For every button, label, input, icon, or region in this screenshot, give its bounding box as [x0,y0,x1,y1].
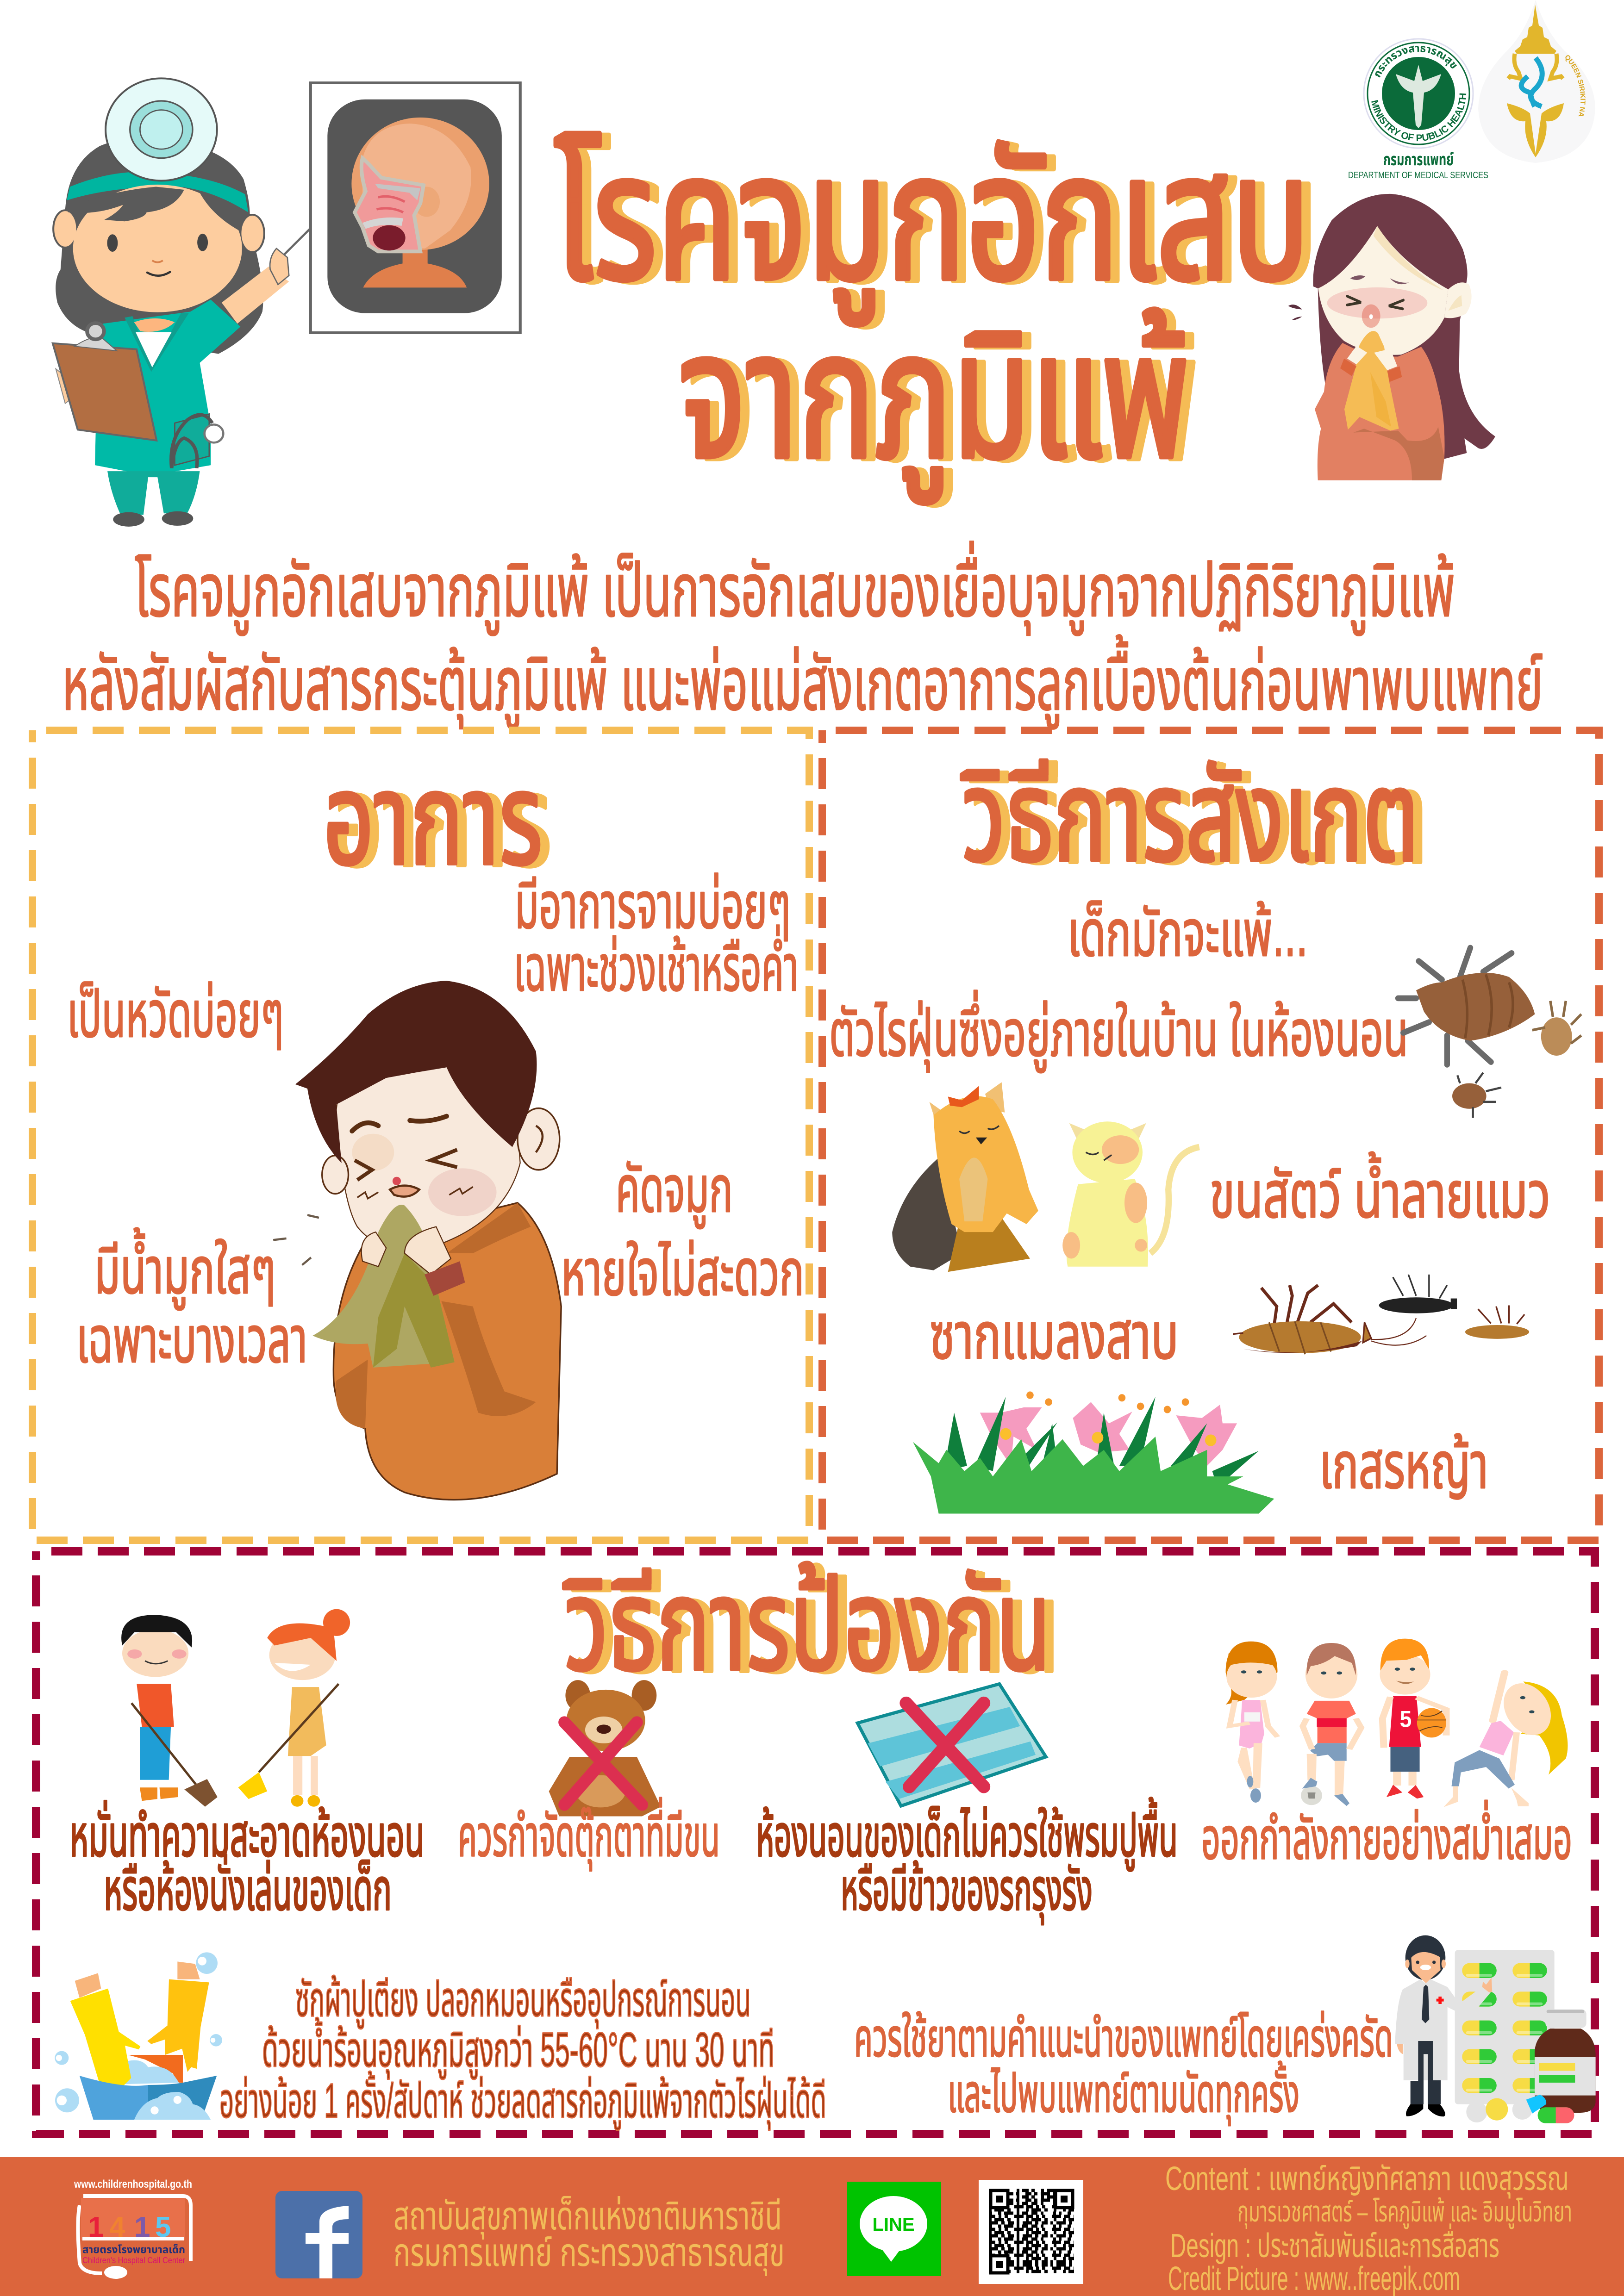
illustration: washing bedding [55,1952,222,2120]
text: wash bedding [219,1972,826,2130]
title [554,119,1319,505]
text: grass pollen: เกสรหญ้า [1319,1429,1488,1502]
logo: ministry of public health [1348,39,1488,180]
heading: how to observe: วิธีการสังเกต [970,747,1428,890]
illustration: carpet crossed out [857,1684,1046,1806]
credits [1165,2160,1572,2296]
text: remove furry toys: ควรกำจัดตุ๊กตาที่มีขน [458,1797,720,1871]
diagram: nasal cross-section [311,83,520,333]
text: wash bedding: ซักผ้าปูเตียง ปลอกหมอนหรืออุปกรณ์การนอน [295,1972,751,2029]
text: wash bedding: อย่างน้อย 1 ครั้ง/สัปดาห์ ช่วยลดสารก่อภูมิแพ้จากตัวไรฝุ่นได้ดี [219,2071,826,2130]
text: frequent colds: เป็นหวัดบ่อยๆ [67,978,284,1051]
text: no carpets: หรือมีข้าวของรกรุงรัง [841,1858,1093,1925]
text: stuffy nose: คัดจมูก [616,1153,733,1229]
text: stuffy nose: หายใจไม่สะดวก [561,1236,804,1309]
illustration: doctor pointing [53,78,339,527]
text: wash bedding: ด้วยน้ำร้อนอุณหภูมิสูงกว่า 55-60°C นาน 30 นาที [262,2017,775,2079]
illustration: sneezing girl [1288,194,1495,480]
title: โรคจมูกอักเสบ [563,121,1319,327]
illustration: dust mites [1398,948,1581,1118]
text: runny nose [76,1227,307,1376]
logo: children's hospital call center: 1 [88,2211,104,2243]
text: children allergic to: เด็กมักจะแพ้... [1068,897,1308,970]
text: follow doctor's advice [854,2009,1393,2126]
heading: symptoms: อาการ [332,751,552,893]
logo: ministry of public health: MINISTRY OF PUBLIC HEALTH [1369,93,1468,143]
illustration: dead cockroaches [1233,1275,1529,1354]
illustration: doctor and medicine [1395,1935,1596,2123]
text: institute name: กรมการแพทย์ กระทรวงสาธารณสุข [394,2231,785,2276]
icon: line [847,2182,941,2276]
icon: line: LINE [872,2215,915,2235]
heading: how to observe: วิธีการสังเกต [961,746,1419,888]
illustration: sneezing boy [273,981,561,1500]
logo: ministry of public health: กรมการแพทย์ [1383,150,1454,169]
title: จากภูมิแพ้ [687,299,1199,505]
text: institute name [394,2194,785,2276]
illustration: children sweeping [121,1609,350,1807]
text: runny nose: มีน้ำมูกใสๆ [94,1227,276,1310]
heading: symptoms: อาการ [323,749,543,891]
logo: children's hospital call center: www.childrenhospital.go.th [74,2178,192,2190]
footer [0,2157,1624,2296]
illustration: children exercising [1226,1639,1568,1807]
illustration: children exercising: 5 [1400,1706,1412,1732]
text: follow doctor's advice: และไปพบแพทย์ตามนัดทุกครั้ง [948,2061,1299,2126]
text: sneezing: เฉพาะช่วงเช้าหรือค่ำ [514,925,799,1004]
logo: ministry of public health: กระทรวงสาธารณสุข [1371,42,1460,79]
subtitle [62,541,1543,729]
logo: children's hospital call center: 4 [109,2211,125,2243]
text: runny nose: เฉพาะบางเวลา [76,1303,307,1376]
panel: symptoms [32,730,809,1540]
logo: children's hospital call center: 5 [155,2211,171,2243]
icon: facebook [275,2191,362,2278]
logo: children's hospital call center [74,2178,192,2279]
logo: children's hospital call center: สายตรงโรงพยาบาลเด็ก [82,2244,185,2255]
panel: prevention [36,1551,1596,2134]
text: clean the bedroom [69,1800,425,1922]
panel: how to observe [822,730,1599,1540]
title: จากภูมิแพ้ [678,298,1190,504]
heading: prevention: วิธีการป้องกัน [563,1555,1051,1697]
logo: children's hospital call center: 1 [134,2211,150,2243]
text: stuffy nose [561,1153,804,1309]
text: clean the bedroom: หมั่นทำความสะอาดห้องนอน [69,1800,425,1868]
logo: children's hospital call center: Children's Hospital Call Center [82,2256,185,2265]
text: sneezing [514,869,799,1004]
text: sneezing: มีอาการจามบ่อยๆ [515,869,791,942]
logo: ministry of public health: DEPARTMENT OF MEDICAL SERVICES [1348,170,1488,180]
illustration: teddy bear crossed out [549,1680,661,1816]
text: cockroach remains: ซากแมลงสาบ [930,1300,1179,1372]
qr code [979,2180,1083,2284]
text: clean the bedroom: หรือห้องนั่งเล่นของเด็ก [104,1854,392,1922]
illustration: dog and cat [892,1082,1199,1272]
heading: prevention: วิธีการป้องกัน [572,1556,1060,1699]
title: โรคจมูกอักเสบ [554,119,1310,325]
text: no carpets: ห้องนอนของเด็กไม่ควรใช้พรมปูพื้น [756,1797,1178,1871]
text: no carpets [756,1797,1178,1925]
text: institute name: สถาบันสุขภาพเด็กแห่งชาติมหาราชินี [394,2194,782,2240]
illustration: grass and flowers [913,1391,1274,1514]
